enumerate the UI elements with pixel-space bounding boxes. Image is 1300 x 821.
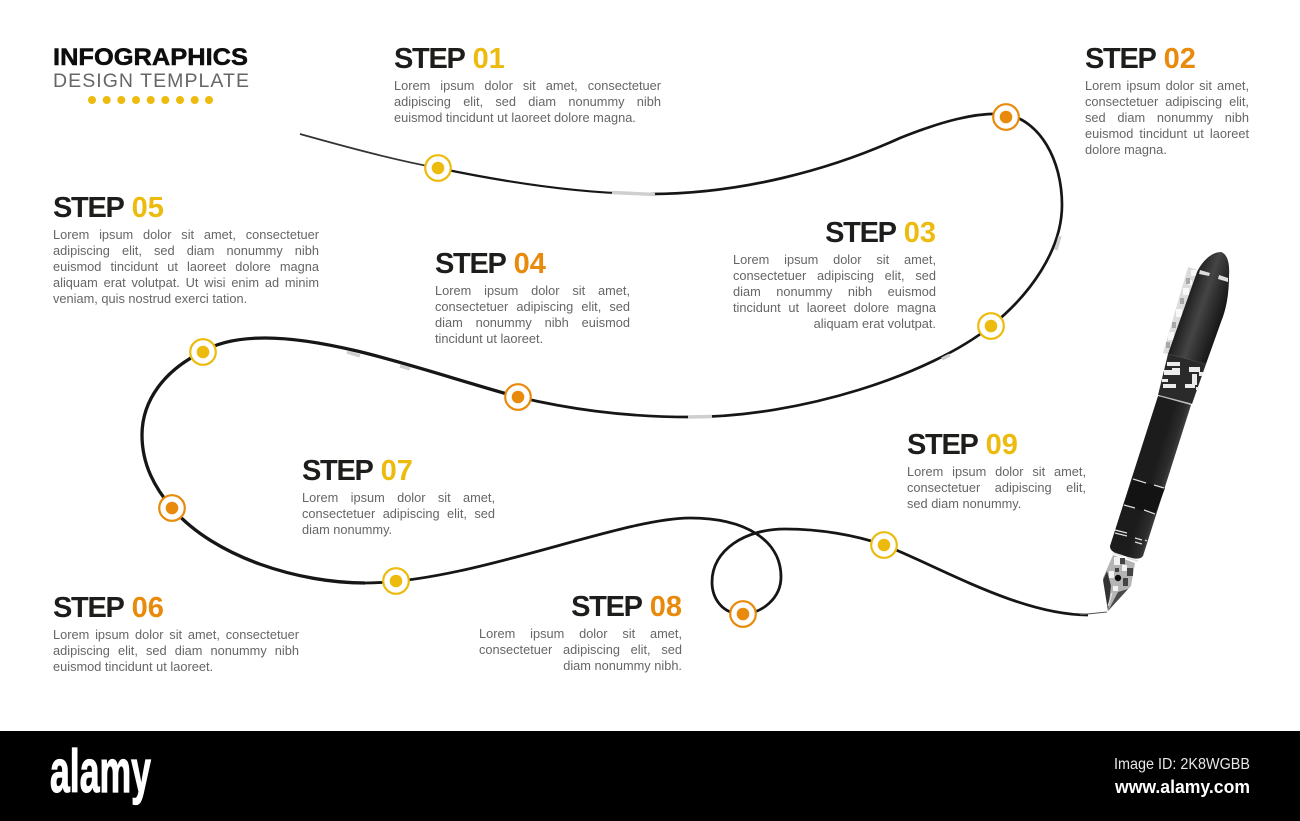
step 1 text: euismod tincidunt ut laoreet dolore magna. xyxy=(394,110,636,125)
step 3 heading: STEP 03 xyxy=(825,217,936,249)
step 5 text xyxy=(53,227,319,306)
step 7 text: Lorem ipsum dolor sit amet, xyxy=(302,490,495,505)
step 9 text: Lorem ipsum dolor sit amet, xyxy=(907,464,1086,479)
alamy logo: alamy xyxy=(50,738,151,805)
ring lower line xyxy=(1160,396,1191,404)
decorative yellow dots xyxy=(88,96,213,104)
step 8 xyxy=(479,591,682,673)
pen cap xyxy=(1168,252,1229,364)
marker 2 xyxy=(993,104,1019,130)
step 3 text xyxy=(733,252,936,331)
tapered end of line xyxy=(1080,612,1107,615)
dark grip band xyxy=(1124,479,1165,515)
step 8 text xyxy=(479,626,682,673)
step 2 text: euismod tincidunt ut laoreet xyxy=(1085,126,1249,141)
marker 8 xyxy=(730,601,756,627)
step 4 text: diam nonummy nibh euismod xyxy=(435,315,630,330)
step 4 text: tincidunt ut laoreet. xyxy=(435,331,543,346)
step 2 xyxy=(1085,43,1249,157)
brush texture xyxy=(347,192,1060,417)
step 2 text xyxy=(1085,78,1249,157)
step 3 xyxy=(733,217,936,331)
bottom segment and loop xyxy=(365,518,1088,615)
step 7 text: diam nonummy. xyxy=(302,522,392,537)
step 2 text: sed diam nonummy nibh xyxy=(1085,110,1249,125)
step 2 text: Lorem ipsum dolor sit amet, xyxy=(1085,78,1249,93)
step 3 text: consectetuer adipiscing elit, sed xyxy=(733,268,936,283)
step 6 text: adipiscing elit, sed diam nonummy nibh xyxy=(53,643,299,658)
step 9 text: sed diam nonummy. xyxy=(907,496,1021,511)
pen ring xyxy=(1158,354,1206,404)
ring highlights xyxy=(1162,362,1203,390)
step 7 text: consectetuer adipiscing elit, sed xyxy=(302,506,495,521)
marker 5 xyxy=(190,339,216,365)
step 1 xyxy=(394,43,661,125)
step 8 text: consectetuer adipiscing elit, sed xyxy=(479,642,682,657)
step 3 text: Lorem ipsum dolor sit amet, xyxy=(733,252,936,267)
title: infographics: INFOGRAPHICS xyxy=(53,44,248,71)
step 3 text: tincidunt ut laoreet dolore magna xyxy=(733,300,936,315)
step 1 text: adipiscing elit, sed diam nonummy nibh xyxy=(394,94,661,109)
step 9 xyxy=(907,429,1086,511)
footer band xyxy=(0,731,1300,821)
nib checker shading xyxy=(1103,557,1133,611)
left segment xyxy=(142,338,518,583)
step 2 text: consectetuer adipiscing elit, xyxy=(1085,94,1249,109)
step 6 text: euismod tincidunt ut laoreet. xyxy=(53,659,213,674)
title block xyxy=(53,44,249,104)
website: www.alamy.com xyxy=(1114,777,1250,797)
step 5 text: euismod tincidunt ut laoreet dolore magna xyxy=(53,259,319,274)
brush double line xyxy=(1022,125,1056,172)
step 5 text: veniam, quis nostrud exerci tation. xyxy=(53,291,247,306)
marker 4 xyxy=(505,384,531,410)
step 5 xyxy=(53,192,319,306)
step 1 text xyxy=(394,78,661,125)
step 2 text: dolore magna. xyxy=(1085,142,1167,157)
marker 9 xyxy=(871,532,897,558)
step 5 text: aliquam erat volutpat. Ut wisi enim ad minim xyxy=(53,275,319,290)
top segment xyxy=(438,168,650,194)
step 5 text: Lorem ipsum dolor sit amet, consectetuer xyxy=(53,227,319,242)
step 6 xyxy=(53,592,299,674)
step 6 heading: STEP 06 xyxy=(53,592,164,624)
step 1 heading: STEP 01 xyxy=(394,43,505,75)
step 9 text xyxy=(907,464,1086,511)
cap highlights xyxy=(1199,270,1228,282)
image id: Image ID: 2K8WGBB xyxy=(1114,756,1250,773)
marker 7 xyxy=(383,568,409,594)
pen clip xyxy=(1163,267,1198,355)
step 4 xyxy=(435,248,630,346)
pen nib xyxy=(1103,555,1135,611)
step 4 text xyxy=(435,283,630,346)
step 5 heading: STEP 05 xyxy=(53,192,164,224)
step 1 text: Lorem ipsum dolor sit amet, consectetuer xyxy=(394,78,661,93)
step 2 heading: STEP 02 xyxy=(1085,43,1196,75)
marker 1 xyxy=(425,155,451,181)
step 4 heading: STEP 04 xyxy=(435,248,546,280)
step 8 text: Lorem ipsum dolor sit amet, xyxy=(479,626,682,641)
tapered start of line xyxy=(300,134,438,168)
pen barrel xyxy=(1110,396,1191,559)
marker 6 xyxy=(159,495,185,521)
step 5 text: adipiscing elit, sed diam nonummy nibh xyxy=(53,243,319,258)
step 7 heading: STEP 07 xyxy=(302,455,413,487)
step 4 text: Lorem ipsum dolor sit amet, xyxy=(435,283,630,298)
step 3 text: diam nonummy nibh euismod xyxy=(733,284,936,299)
barrel highlights xyxy=(1113,479,1164,561)
step 6 text: Lorem ipsum dolor sit amet, consectetuer xyxy=(53,627,299,642)
right segment xyxy=(518,114,1062,417)
step 6 text xyxy=(53,627,299,674)
step 7 text xyxy=(302,490,495,537)
step 3 text: aliquam erat volutpat. xyxy=(814,316,936,331)
step 9 heading: STEP 09 xyxy=(907,429,1018,461)
step 8 text: diam nonummy nibh. xyxy=(563,658,682,673)
step 7 xyxy=(302,455,495,537)
subtitle: design template: DESIGN TEMPLATE xyxy=(53,70,249,92)
step 9 text: consectetuer adipiscing elit, xyxy=(907,480,1086,495)
step 8 heading: STEP 08 xyxy=(571,591,682,623)
step 4 text: consectetuer adipiscing elit, sed xyxy=(435,299,630,314)
marker 3 xyxy=(978,313,1004,339)
